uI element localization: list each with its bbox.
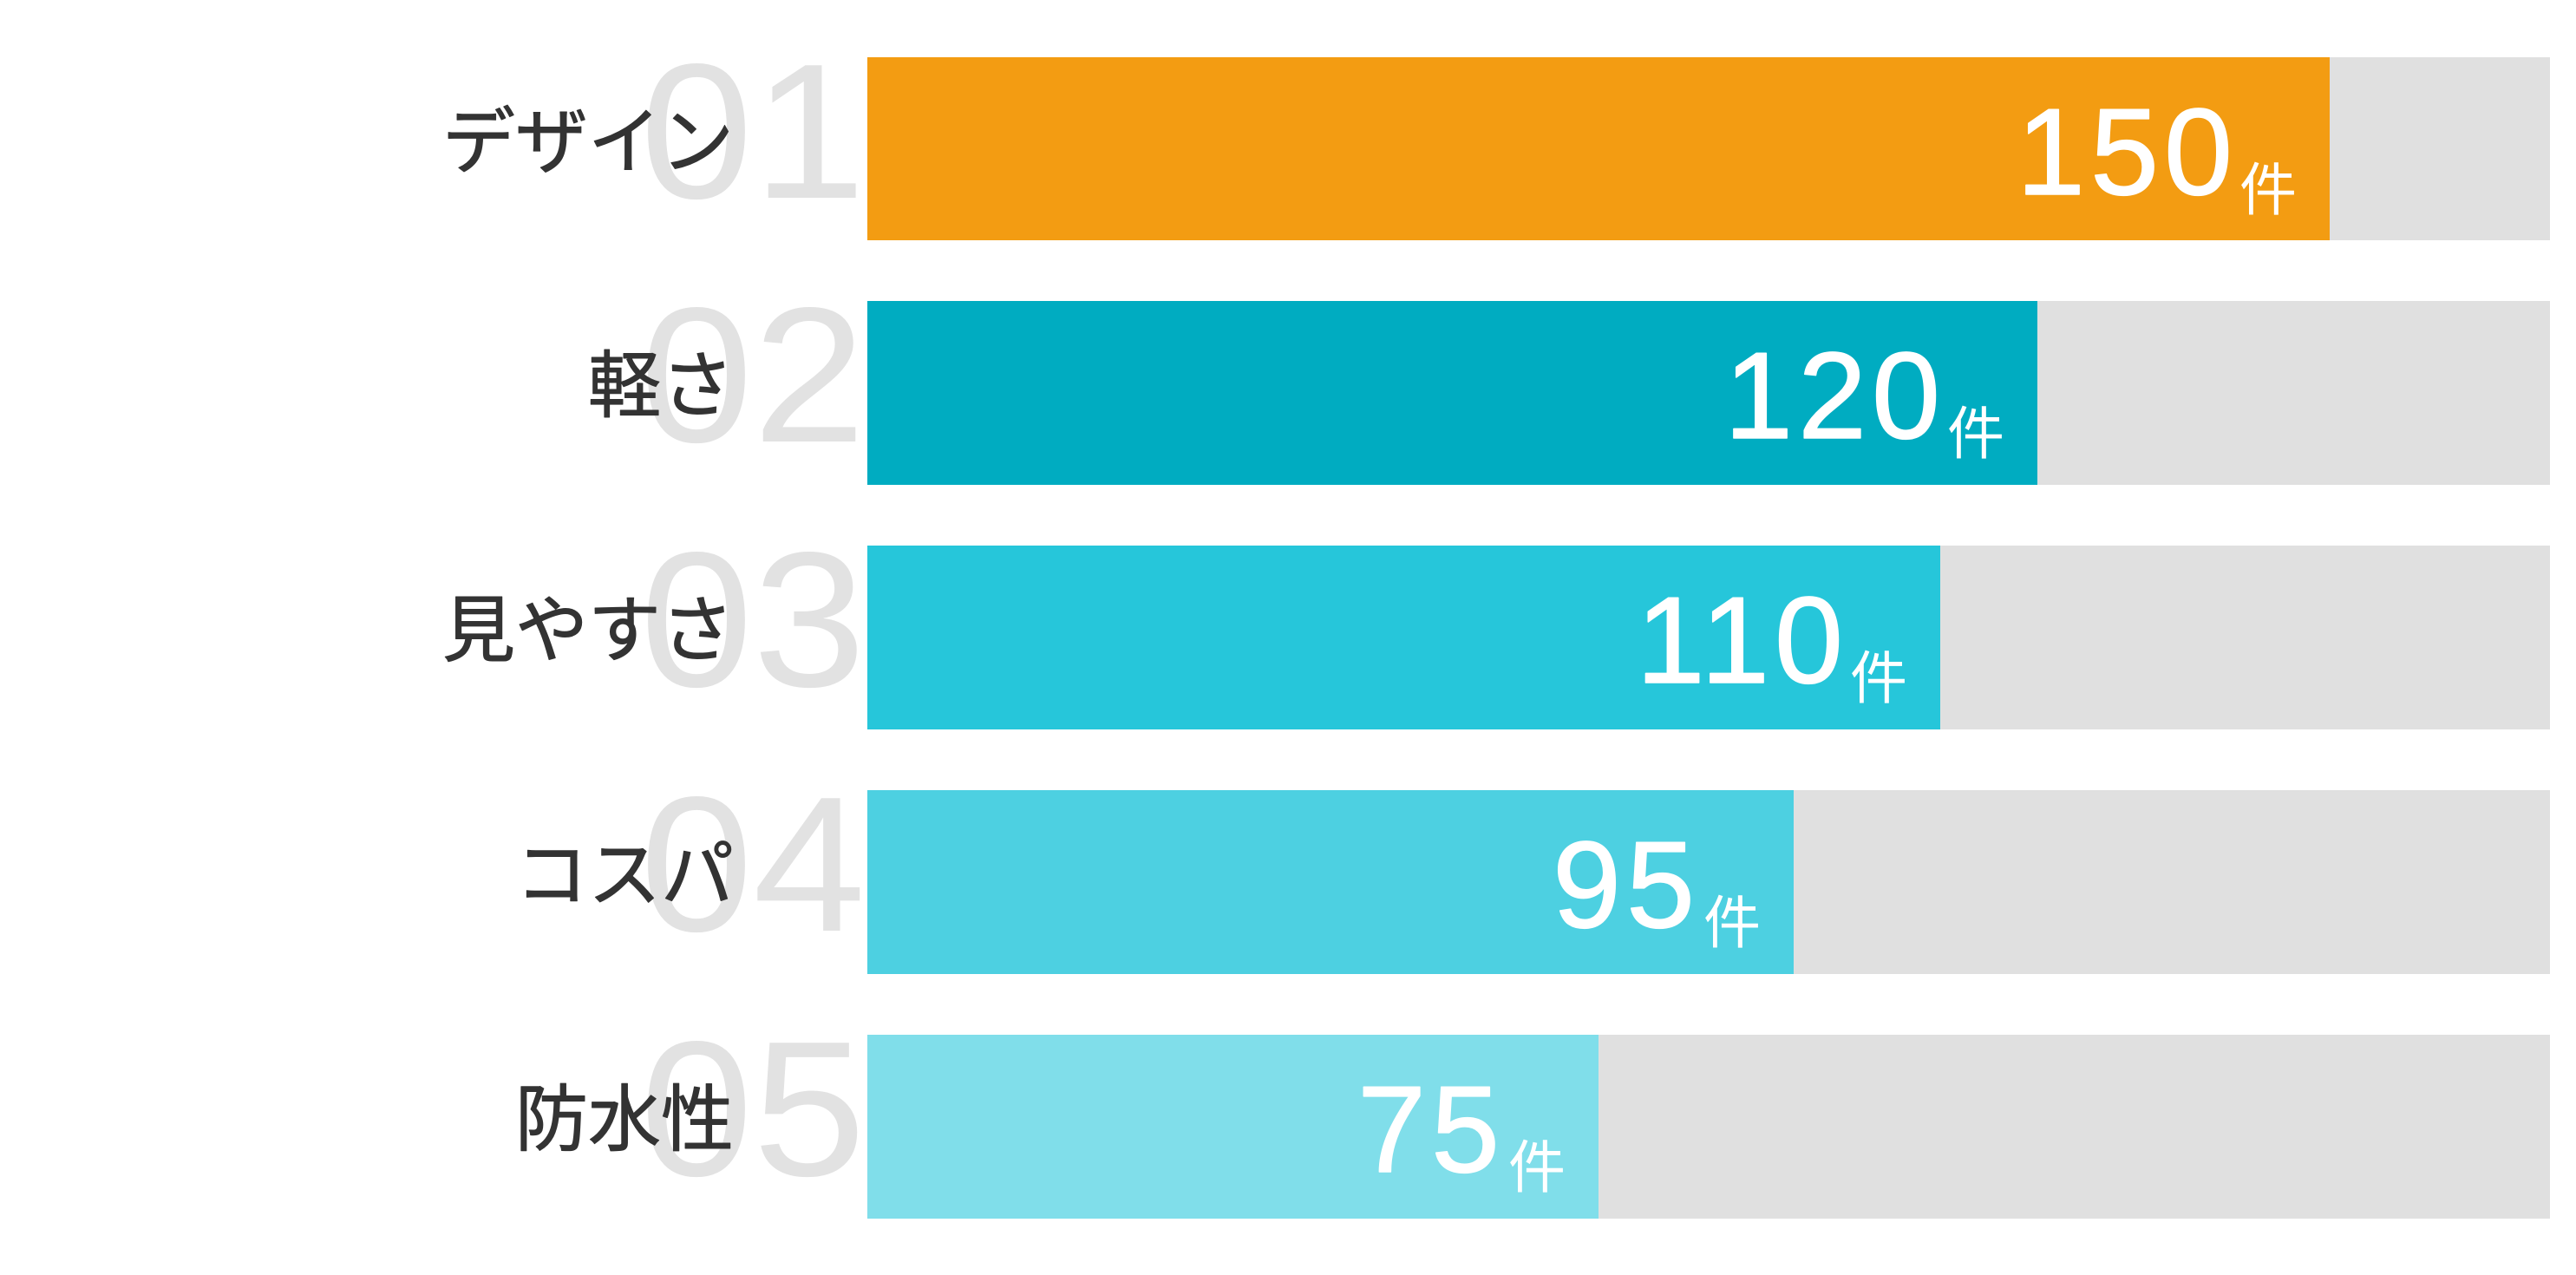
row 05: 防水性: [515, 1002, 2550, 1219]
value 75: 75: [1357, 1061, 1505, 1199]
unit 件: 件: [2239, 158, 2297, 222]
row 01: デザイン: [442, 24, 2550, 240]
label 軽さ: 軽さ: [588, 345, 734, 427]
value 95: 95: [1553, 816, 1700, 954]
unit 件: 件: [1850, 646, 1907, 710]
rank number 02: 02: [640, 268, 866, 483]
bar 95: [867, 790, 1794, 974]
unit 件: 件: [1947, 402, 2004, 466]
label コスパ: コスパ: [515, 834, 734, 916]
track: [867, 1035, 2550, 1219]
rank number 05: 05: [640, 1002, 866, 1217]
track: [867, 546, 2550, 729]
bar 110: [867, 546, 1940, 729]
rank number 01: 01: [640, 24, 866, 239]
value 110: 110: [1637, 572, 1848, 709]
bar 150: [867, 57, 2330, 240]
bar 120: [867, 301, 2037, 485]
row 02: 軽さ: [588, 268, 2550, 485]
unit 件: 件: [1508, 1135, 1566, 1200]
value 120: 120: [1724, 327, 1945, 465]
row 03: 見やすさ: [442, 513, 2550, 729]
label 防水性: 防水性: [515, 1079, 734, 1161]
rank number 03: 03: [640, 513, 866, 728]
track: [867, 790, 2550, 974]
label 見やすさ: 見やすさ: [442, 590, 734, 671]
row 04: コスパ: [515, 757, 2550, 974]
label デザイン: デザイン: [442, 101, 734, 183]
track: [867, 57, 2550, 240]
rank number 04: 04: [640, 757, 866, 972]
unit 件: 件: [1703, 891, 1761, 955]
track: [867, 301, 2550, 485]
bar 75: [867, 1035, 1599, 1219]
value 150: 150: [2017, 83, 2238, 221]
